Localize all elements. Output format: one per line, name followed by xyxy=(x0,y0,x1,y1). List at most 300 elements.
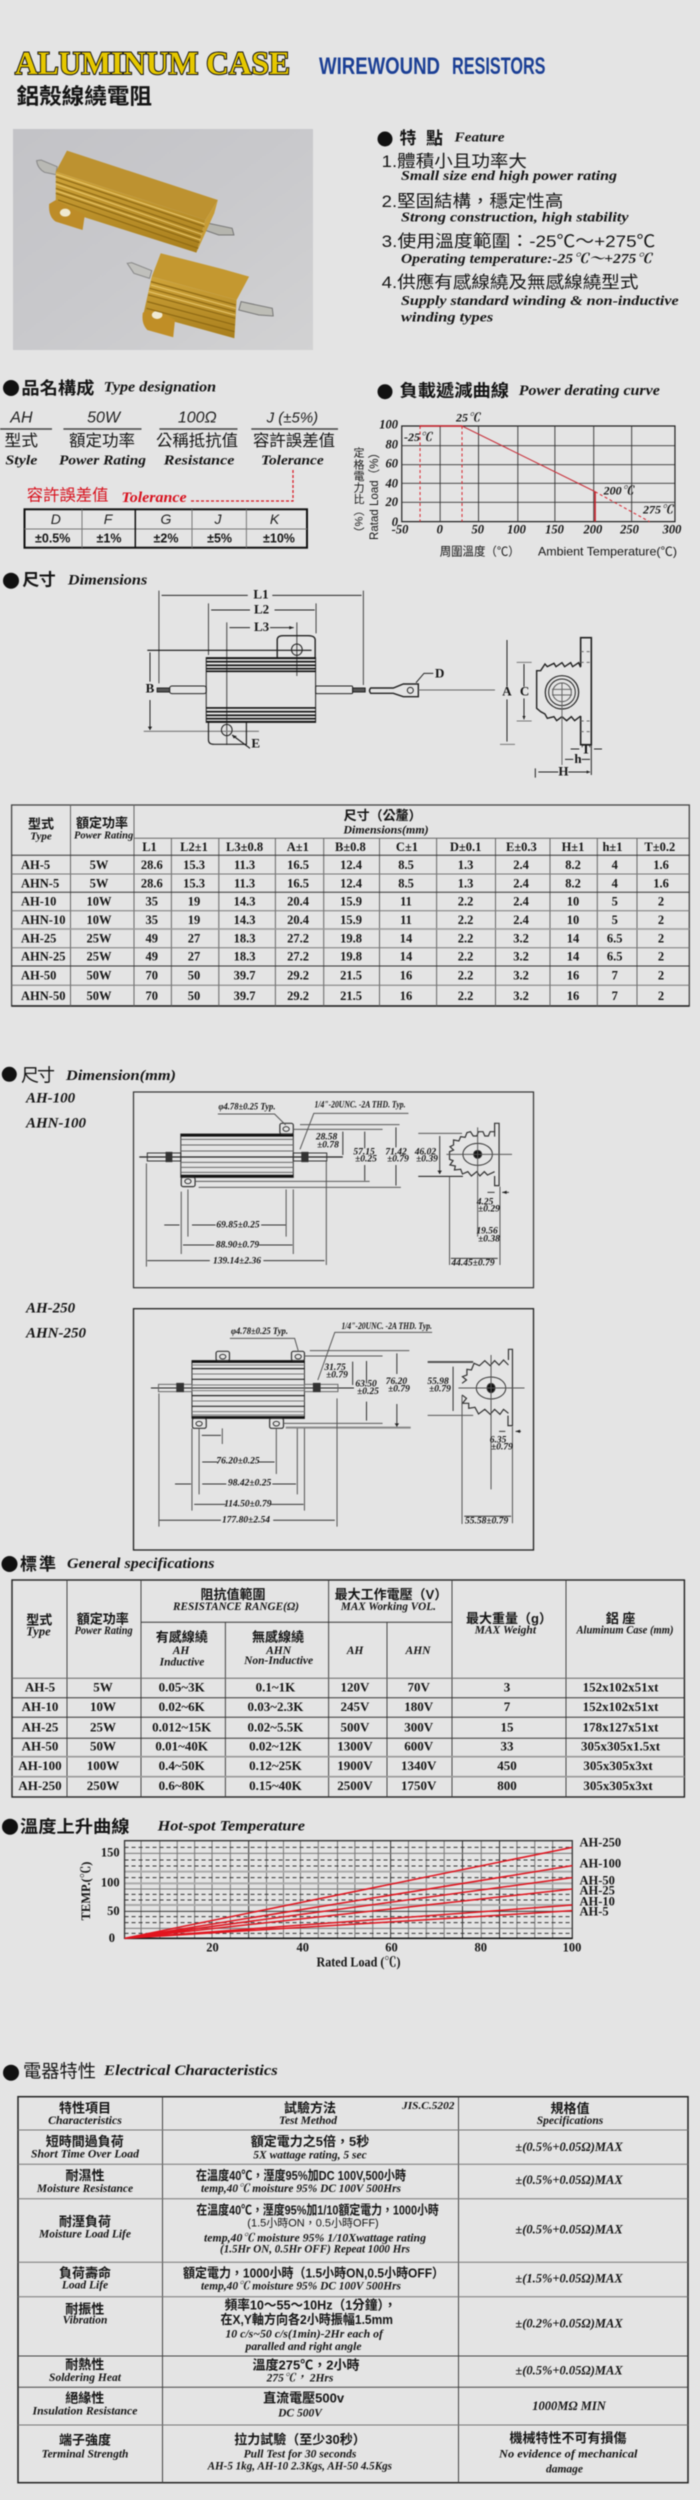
row AH-5: 4 xyxy=(612,858,619,872)
tolerance table: G xyxy=(161,511,172,527)
table header xyxy=(48,2101,604,2127)
row: moisture load life: temp,40℃ moisture 95% 1/10Xwattage rating xyxy=(204,2233,426,2245)
chart axis ticks: 60 xyxy=(386,456,399,470)
tolerance heading: Tolerance xyxy=(121,490,187,506)
row AHN-10: 5 xyxy=(612,913,618,927)
tolerance table: ±2% xyxy=(154,532,178,546)
row AH-25: 25W xyxy=(86,931,112,945)
dimension labels: AH-100 xyxy=(213,1101,500,1269)
row: short time over load: 短時間過負荷 xyxy=(46,2134,124,2149)
row AH-25: 300V xyxy=(404,1719,434,1734)
dimension letters: B xyxy=(146,680,155,695)
row: load life: temp,40℃ moisture 95% DC 100V 500Hrs xyxy=(201,2280,402,2292)
row AHN-10: 11 xyxy=(400,913,412,927)
row AH-10: 0.03~2.3K xyxy=(247,1699,304,1714)
table header: AH xyxy=(346,1645,364,1657)
row AH-5: 70V xyxy=(408,1679,431,1694)
heading: type designation: Type designation xyxy=(104,380,216,396)
row AH-50: 16 xyxy=(567,968,579,982)
row AH-25: 49 xyxy=(146,931,158,945)
row AH-250 xyxy=(18,1778,653,1793)
heading: type designation: 品名構成 xyxy=(21,378,94,398)
row AH-25: 15 xyxy=(500,1719,514,1734)
row AH-10: 10 xyxy=(567,895,579,909)
row AHN-25: 6.5 xyxy=(607,950,623,964)
row AHN-10: 19 xyxy=(188,913,200,927)
heading: electrical characteristics xyxy=(3,2062,278,2082)
row AH-25: 2.2 xyxy=(458,931,473,945)
row AH-50: AH-50 xyxy=(21,968,56,982)
table sub-header: B±0.8 xyxy=(335,840,366,854)
designation row: English labels: Resistance xyxy=(163,452,234,467)
designation row: English labels: Tolerance xyxy=(261,452,324,467)
heading: dimensions xyxy=(3,571,148,590)
row: moisture resistance: 在溫度40℃，溼度95%加DC 100V,500小時 xyxy=(196,2168,406,2183)
heading: hot-spot temperature: 溫度上升曲線 xyxy=(20,1818,130,1837)
dimension letters: h xyxy=(574,751,582,766)
row AHN-5: 16.5 xyxy=(287,876,309,890)
table header: 額定功率 xyxy=(77,1611,129,1626)
row AH-5: 1.3 xyxy=(458,858,473,872)
table header: 試驗方法 xyxy=(284,2101,336,2116)
feature 2: 2.堅固結構，穩定性高 xyxy=(382,192,563,211)
table header: 鋁 座 xyxy=(606,1611,635,1626)
feature 3: Operating temperature:-25℃～+275℃ xyxy=(401,251,654,266)
row AHN-25: 49 xyxy=(146,950,158,964)
row: soldering heat: Soldering Heat xyxy=(49,2372,122,2384)
heading: general specifications: General specifications xyxy=(67,1556,215,1572)
chart axis ticks: -50 xyxy=(392,522,409,536)
row AHN-25: 19.8 xyxy=(340,950,362,964)
row AHN-5: 8.5 xyxy=(398,876,414,890)
row: insulation resistance: 直流電壓500v xyxy=(263,2391,345,2406)
row: load life: 負荷壽命 xyxy=(59,2265,111,2280)
feature 1: 1.體積小且功率大 xyxy=(382,152,527,171)
heading: feature: 特 點 xyxy=(400,129,443,148)
row AH-10: 7 xyxy=(504,1699,511,1714)
row: vibration: paralled and right angle xyxy=(244,2341,362,2353)
row: load life xyxy=(59,2265,623,2292)
row AH-50: 21.5 xyxy=(340,968,362,982)
table header: Inductive xyxy=(159,1656,204,1668)
dimension labels: AH-100: 28.58 xyxy=(315,1132,337,1142)
dimension labels: AH-250: 76.20 xyxy=(386,1377,407,1387)
row AHN-50 xyxy=(21,989,664,1003)
table header: Type xyxy=(30,830,52,842)
chart annotations: -25℃ xyxy=(404,430,434,444)
row: vibration: 耐振性 xyxy=(65,2301,104,2316)
row: short time over load: 5X wattage rating, 5 sec xyxy=(253,2149,367,2161)
row: load life: ±(1.5%+0.05Ω)MAX xyxy=(515,2272,623,2286)
row AHN-50: 16 xyxy=(400,989,412,1003)
heading: dimension (mm): 尺寸 xyxy=(21,1066,55,1086)
table sub-header: C±1 xyxy=(396,840,418,854)
row: moisture load life: Moisture Load Life xyxy=(38,2228,131,2240)
row: moisture load life: 在溫度40℃，溼度95%加1/10額定電力，1000小時 xyxy=(196,2202,439,2217)
row: load life: 額定電力，1000小時（1.5小時ON,0.5小時OFF） xyxy=(183,2265,444,2280)
row AH-10: AH-10 xyxy=(21,895,56,909)
chart x-axis title: Ambient Temperature(℃) xyxy=(538,544,677,558)
row AH-25: 25W xyxy=(90,1719,116,1734)
tolerance table: ±1% xyxy=(97,532,121,546)
panel: power derating curve xyxy=(352,381,682,558)
row AH-250: 800 xyxy=(497,1778,517,1793)
row AH-5: 1.6 xyxy=(653,858,669,872)
table header: 阻抗值範圍 xyxy=(200,1587,266,1602)
tolerance heading xyxy=(27,470,293,506)
chart axis titles: TEMP.(℃) xyxy=(79,1862,93,1920)
table header: MAX Weight xyxy=(474,1625,537,1637)
chart axis ticks: 40 xyxy=(296,1940,309,1954)
row AH-10: 2.4 xyxy=(513,895,530,909)
heading: power derating curve: Power derating curve xyxy=(519,383,660,399)
row AH-50: 1300V xyxy=(337,1739,373,1754)
table header: 型式 xyxy=(26,1613,52,1628)
subtitle: wirewound resistors: RESISTORS xyxy=(452,53,546,80)
model labels: AH-100: AHN-100 xyxy=(25,1116,86,1132)
feature 2: Strong construction, high stability xyxy=(401,210,630,225)
row: terminal strength: AH-5 1kg, AH-10 2.3Kgs, AH-50 4.5Kgs xyxy=(207,2460,392,2472)
row AH-10: 35 xyxy=(146,895,158,909)
dimension labels: AH-250: φ4.78±0.25 Typ. xyxy=(231,1327,288,1337)
table: electrical characteristics xyxy=(18,2097,688,2483)
row AHN-50: 21.5 xyxy=(340,989,362,1003)
table: general specifications xyxy=(12,1580,684,1797)
table header xyxy=(28,808,429,842)
row AHN-10: 2 xyxy=(658,913,664,927)
chart axis ticks: 0 xyxy=(392,515,399,529)
row AH-5: 15.3 xyxy=(183,858,205,872)
row AHN-5: 1.3 xyxy=(458,876,473,890)
chart axis ticks: 20 xyxy=(206,1940,219,1954)
chart axis ticks: 20 xyxy=(384,495,399,509)
dimension labels: AH-250: ±0.79 xyxy=(491,1442,513,1452)
title: aluminum case: ALUMINUM CASE xyxy=(15,46,290,82)
row AH-5: 0.05~3K xyxy=(159,1679,206,1694)
model labels: AH-250: AH-250 xyxy=(25,1301,76,1317)
designation row: Chinese labels: 容許誤差值 xyxy=(253,432,335,450)
row AH-250: 0.6~80K xyxy=(159,1778,206,1793)
dimension labels: AH-250: 31.75 xyxy=(323,1363,346,1373)
row AH-5: 11.3 xyxy=(234,858,255,872)
row AH-5 xyxy=(25,1679,659,1694)
row: moisture resistance: 耐濕性 xyxy=(65,2168,105,2183)
panel: AH-250 drawing xyxy=(134,1309,534,1550)
row AH-5: AH-5 xyxy=(25,1679,56,1694)
row AH-5: 5W xyxy=(90,858,109,872)
panel: features xyxy=(378,129,679,325)
row: short time over load: 額定電力之5倍，5秒 xyxy=(251,2134,369,2149)
row AHN-50: 39.7 xyxy=(234,989,256,1003)
table header: Test Method xyxy=(279,2115,337,2127)
row AH-100: AH-100 xyxy=(18,1758,62,1773)
designation row: codes: 50W xyxy=(87,410,122,427)
row AHN-10: 2.2 xyxy=(458,913,473,927)
designation row: codes: 100Ω xyxy=(178,410,217,427)
row AH-100: 0.4~50K xyxy=(159,1758,206,1773)
dimension labels: AH-250 xyxy=(216,1322,513,1527)
heading: electrical characteristics: Electrical Characteristics xyxy=(103,2063,278,2079)
row AH-25: 14 xyxy=(567,931,580,945)
row AH-5: 12.4 xyxy=(340,858,363,872)
chart annotations: 275℃ xyxy=(642,502,675,516)
row AH-50: 3.2 xyxy=(513,968,529,982)
row AH-250: AH-250 xyxy=(18,1778,62,1793)
row AH-100: 0.12~25K xyxy=(249,1758,303,1773)
row AH-25: AH-25 xyxy=(22,1719,59,1734)
dimension labels: AH-250: 177.80±2.54 xyxy=(222,1515,270,1525)
row AH-10: 15.9 xyxy=(340,895,362,909)
chart: derating grid and curve xyxy=(402,426,675,522)
row: terminal strength: Pull Test for 30 seconds xyxy=(244,2448,357,2460)
dimension letters: C xyxy=(520,684,529,699)
row AH-250: 2500V xyxy=(337,1778,373,1793)
row: moisture load life: (1.5小時ON，0.5小時OFF) xyxy=(247,2217,379,2230)
row: moisture load life xyxy=(38,2202,623,2256)
chart series labels: AH-5 xyxy=(580,1904,609,1918)
row AHN-50: 3.2 xyxy=(513,989,529,1003)
row: soldering heat: 275℃， 2Hrs xyxy=(266,2373,334,2385)
row: moisture load life: (1.5Hr ON, 0.5Hr OFF) Repeat 1000 Hrs xyxy=(220,2244,410,2256)
row AH-25: 18.3 xyxy=(234,931,256,945)
tolerance heading: 容許誤差值 xyxy=(27,487,108,505)
row AHN-10: 2.4 xyxy=(513,913,530,927)
row AH-10 xyxy=(21,895,664,909)
row AH-25: 27 xyxy=(188,931,200,945)
dimension letters xyxy=(146,586,591,778)
chart x-axis title: 周圍溫度（℃） xyxy=(440,543,520,558)
table grid xyxy=(12,805,689,1006)
row: soldering heat xyxy=(49,2357,623,2385)
chart series labels: AH-250 xyxy=(580,1836,621,1850)
chart series labels: AH-25 xyxy=(580,1883,615,1897)
heading: dimensions: 尺寸 xyxy=(22,571,56,590)
designation row: Chinese labels: 型式 xyxy=(4,432,38,450)
row AH-100 xyxy=(18,1758,653,1773)
heading: hot-spot temperature xyxy=(2,1818,306,1837)
row: load life: Load Life xyxy=(61,2279,108,2291)
row AHN-50: AHN-50 xyxy=(21,989,65,1003)
chart: hot-spot grid and curves xyxy=(125,1841,572,1938)
row AH-50: 39.7 xyxy=(234,968,256,982)
heading: power derating curve: 負載遞減曲線 xyxy=(400,381,509,401)
row: terminal strength: No evidence of mechanical xyxy=(498,2449,638,2461)
row AH-25: 0.02~5.5K xyxy=(247,1719,304,1734)
row: short time over load xyxy=(31,2134,623,2161)
dimension letters: L1 xyxy=(253,586,269,601)
row AH-50: 16 xyxy=(400,968,412,982)
dimension labels: AH-250: ±0.79 xyxy=(429,1384,451,1394)
table sub-header xyxy=(142,840,675,854)
panel: AH-100 drawing xyxy=(134,1092,534,1288)
row: vibration: 10 c/s~50 c/s(1min)-2Hr each of xyxy=(225,2329,384,2341)
tolerance table: ±10% xyxy=(263,532,295,546)
row: moisture resistance: temp,40℃ moisture 95% DC 100V 500Hrs xyxy=(201,2183,402,2195)
chart axis ticks: 80 xyxy=(386,438,399,452)
row AH-25: AH-25 xyxy=(21,931,56,945)
row AH-25: 500V xyxy=(341,1719,370,1734)
row AH-25: 19.8 xyxy=(340,931,362,945)
table header: 最大重量（g） xyxy=(466,1611,552,1626)
row: vibration: Vibration xyxy=(63,2314,107,2326)
table header: Dimensions(mm) xyxy=(342,822,429,836)
row: insulation resistance: 1000MΩ MIN xyxy=(532,2399,607,2413)
dimension labels: AH-250: 114.50±0.79 xyxy=(224,1499,272,1509)
row AH-25 xyxy=(22,1719,659,1734)
table sub-header: E±0.3 xyxy=(506,840,537,854)
chart x-axis title xyxy=(440,543,677,558)
row: insulation resistance: Insulation Resistance xyxy=(31,2405,137,2417)
row AH-5: 8.2 xyxy=(565,858,581,872)
row AH-10: 11 xyxy=(400,895,412,909)
dimension labels: AH-100: 46.02 xyxy=(414,1147,436,1157)
row AH-10: 152x102x51xt xyxy=(583,1699,659,1714)
tolerance table xyxy=(24,509,307,548)
dimension labels: AH-100: 139.14±2.36 xyxy=(213,1256,261,1266)
product photo xyxy=(13,129,313,350)
table sub-header: H±1 xyxy=(562,840,584,854)
table sub-header: D±0.1 xyxy=(450,840,481,854)
chart series labels: AH-10 xyxy=(580,1894,615,1908)
dimension labels: AH-250: 63.50 xyxy=(355,1379,377,1389)
table header: Characteristics xyxy=(48,2115,122,2127)
row AH-25: 3.2 xyxy=(513,931,529,945)
feature 1 xyxy=(382,152,617,183)
designation row: codes xyxy=(0,410,338,429)
dimension labels: AH-250: ±0.79 xyxy=(388,1384,410,1394)
table sub-header: L2±1 xyxy=(180,840,208,854)
table header: 額定功率 xyxy=(76,816,128,831)
heading: dimension (mm) xyxy=(2,1066,176,1086)
feature 4: winding types xyxy=(401,310,493,325)
dimension letters: T xyxy=(582,741,591,756)
chart axis ticks: 250 xyxy=(619,522,640,536)
chart axis ticks: 100 xyxy=(563,1940,581,1954)
table header: AHN xyxy=(405,1645,431,1657)
row: moisture load life: ±(0.5%+0.05Ω)MAX xyxy=(515,2222,623,2236)
row AH-250: 250W xyxy=(87,1778,119,1793)
drawing: AH-100 outline xyxy=(139,1113,512,1267)
table header: 有感線繞 xyxy=(156,1629,208,1644)
row AHN-10: 20.4 xyxy=(287,913,310,927)
table header: Specifications xyxy=(537,2115,604,2127)
table header: AH xyxy=(172,1645,190,1657)
row AH-5: 3 xyxy=(504,1679,511,1694)
table grid xyxy=(18,2097,688,2483)
row: soldering heat: 耐熱性 xyxy=(65,2357,104,2372)
row AH-10: 19 xyxy=(188,895,200,909)
dimension labels: AH-100: ±0.78 xyxy=(317,1140,339,1150)
dimension labels: AH-100: φ4.78±0.25 Typ. xyxy=(218,1102,276,1112)
row: moisture resistance xyxy=(36,2168,623,2195)
row AHN-10: 15.9 xyxy=(340,913,362,927)
chart axis ticks: 50 xyxy=(471,522,485,536)
table header: 規格值 xyxy=(550,2101,590,2116)
dimension letters: H xyxy=(558,763,568,778)
row AH-50: 50W xyxy=(86,968,112,982)
row AHN-50: 50 xyxy=(188,989,200,1003)
table sub-header: L3±0.8 xyxy=(226,840,263,854)
row AHN-25: 14 xyxy=(400,950,413,964)
row AH-50: 70 xyxy=(146,968,158,982)
dimension letters: E xyxy=(251,735,260,750)
model labels: AH-250 xyxy=(25,1301,86,1342)
row AHN-5: 11.3 xyxy=(234,876,255,890)
row: insulation resistance xyxy=(31,2390,607,2420)
row AHN-25: 27 xyxy=(188,950,200,964)
chart y-axis title: 定格電力比（%） xyxy=(352,446,364,539)
row AH-5 xyxy=(21,858,669,872)
row AHN-50: 2 xyxy=(658,989,664,1003)
row AHN-25: 14 xyxy=(567,950,580,964)
table grid xyxy=(12,1580,684,1797)
dimension labels: AH-100: ±0.38 xyxy=(478,1235,500,1245)
heading: general specifications xyxy=(2,1554,215,1574)
feature 4 xyxy=(382,272,679,325)
designation row: English labels xyxy=(5,452,324,467)
chart axis ticks xyxy=(101,1846,581,1954)
row: vibration: 在X,Y軸方向各2小時振幅1.5mm xyxy=(220,2312,393,2327)
dimension labels: AH-250: 1/4"-20UNC. -2A THD. Typ. xyxy=(341,1322,432,1332)
subtitle: wirewound resistors xyxy=(319,53,546,80)
row AH-25: 2 xyxy=(658,931,664,945)
drawing: resistor front view xyxy=(144,591,365,748)
chart axis ticks: 0 xyxy=(109,1931,115,1945)
row AH-25: 6.5 xyxy=(607,931,623,945)
row AHN-50: 16 xyxy=(567,989,579,1003)
chart axis ticks: 150 xyxy=(101,1846,120,1860)
row AHN-10: 10W xyxy=(86,913,112,927)
row AHN-25: 27.2 xyxy=(287,950,309,964)
row AH-10: 5 xyxy=(612,895,618,909)
row AHN-25: AHN-25 xyxy=(21,950,65,964)
chart series labels: AH-100 xyxy=(580,1856,621,1870)
tolerance table: D xyxy=(51,511,61,527)
designation row: codes: J (±5%) xyxy=(266,410,318,427)
row AH-25 xyxy=(21,931,664,945)
heading: dimensions: Dimensions xyxy=(67,572,148,588)
row: terminal strength: 機械特性不可有損傷 xyxy=(509,2431,627,2446)
table header: Aluminum Case (mm) xyxy=(576,1625,674,1637)
feature 3: 3.使用溫度範圍：-25℃～+275℃ xyxy=(382,231,655,251)
row AHN-50: 29.2 xyxy=(287,989,309,1003)
table header: RESISTANCE RANGE(Ω) xyxy=(172,1601,299,1613)
feature 4: 4.供應有感線繞及無感線繞型式 xyxy=(382,272,638,292)
row AH-50: 2.2 xyxy=(458,968,473,982)
row AHN-10: AHN-10 xyxy=(21,913,65,927)
chart axis ticks: 80 xyxy=(475,1940,487,1954)
row AH-10: 20.4 xyxy=(287,895,310,909)
chart y-axis title: Ratad Load（%） xyxy=(367,447,381,540)
row AH-50: 7 xyxy=(612,968,618,982)
row AHN-50: 70 xyxy=(146,989,158,1003)
designation row: English labels: Style xyxy=(5,452,37,467)
dimension letters: A xyxy=(502,684,512,699)
table header: JIS.C.5202 xyxy=(401,2101,455,2112)
feature 1: Small size end high power rating xyxy=(401,168,617,183)
row AHN-50: 50W xyxy=(86,989,112,1003)
row AHN-50: 7 xyxy=(612,989,618,1003)
row AHN-25: 2 xyxy=(658,950,664,964)
row AH-10: 14.3 xyxy=(234,895,256,909)
row: insulation resistance: DC 500V xyxy=(277,2408,323,2420)
table header: Power Rating xyxy=(74,830,133,841)
row: vibration: ±(0.2%+0.05Ω)MAX xyxy=(515,2317,623,2331)
row AHN-25: 3.2 xyxy=(513,950,529,964)
row AHN-5: 4 xyxy=(612,876,619,890)
row AH-25: 27.2 xyxy=(287,931,309,945)
row AHN-10 xyxy=(21,913,664,927)
